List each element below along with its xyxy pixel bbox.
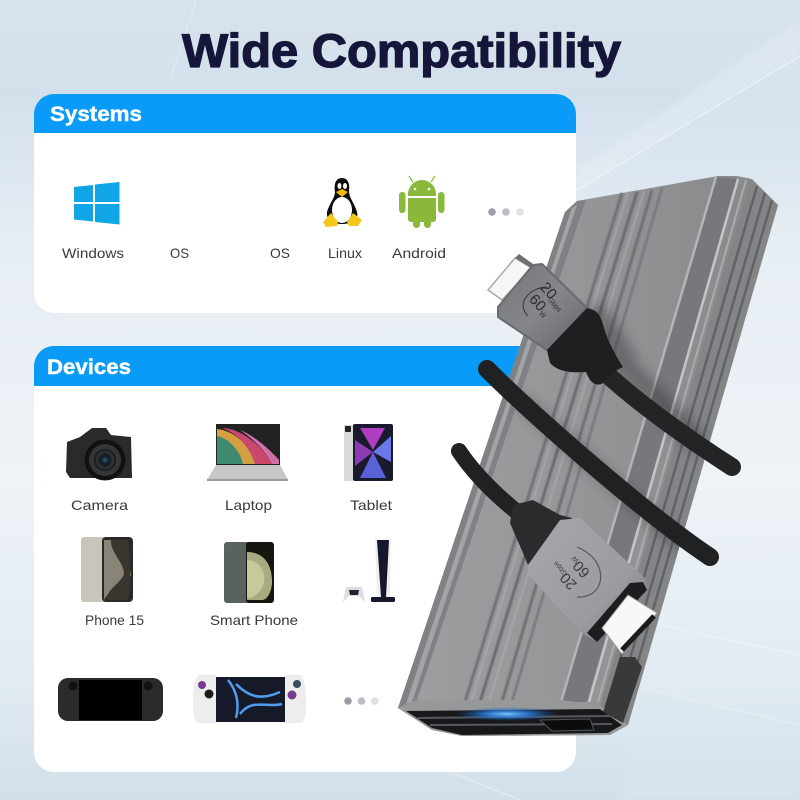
icon: linux penguin <box>323 178 362 227</box>
label: smart phone: Smart Phone <box>210 612 298 628</box>
middle cable <box>487 369 710 557</box>
lower connector arc <box>577 547 601 597</box>
label: camera: Camera <box>71 497 128 513</box>
upper connector print: W <box>537 310 547 320</box>
enclosure body <box>398 176 778 736</box>
panel: systems <box>34 94 576 313</box>
bottom lip <box>398 700 628 736</box>
label: laptop: Laptop <box>225 497 272 513</box>
lower connector print: 60 <box>570 557 594 581</box>
lower cable <box>459 451 522 516</box>
upper connector print <box>525 279 563 320</box>
upper cable <box>600 368 732 467</box>
icon: camera <box>66 428 132 480</box>
label: windows: Windows <box>62 245 124 261</box>
systems header <box>34 94 576 133</box>
enclosure <box>398 176 778 736</box>
label: linux: Linux <box>328 245 362 261</box>
devices heading: Devices <box>47 356 131 379</box>
ribs <box>465 188 662 702</box>
lower connector print <box>552 554 594 593</box>
icon: handheld white <box>193 675 306 723</box>
icon: phone 15 <box>81 537 133 602</box>
lower boot <box>510 500 572 565</box>
lower connector print: W <box>571 554 581 564</box>
upper boot <box>547 308 623 384</box>
icon: laptop <box>207 424 288 481</box>
label: tablet: Tablet <box>350 497 392 513</box>
dark channel <box>562 177 737 702</box>
panel: devices <box>34 346 576 772</box>
label: phone 15: Phone 15 <box>85 612 144 628</box>
lower connector print: Gbps <box>552 559 569 577</box>
label: os 2: OS <box>270 245 290 261</box>
lower plug tip <box>602 595 657 654</box>
more dots: systems <box>488 208 524 216</box>
lower connector print: 20 <box>557 569 581 593</box>
right bevel <box>600 180 778 725</box>
light edges <box>561 177 746 702</box>
dark side block <box>603 657 642 723</box>
lower housing <box>528 518 647 642</box>
upper usb-c connector <box>488 254 732 467</box>
devices header <box>34 346 540 386</box>
usb port <box>540 719 594 731</box>
led glow <box>455 707 559 721</box>
plug collar <box>587 582 647 642</box>
upper housing <box>498 264 587 350</box>
label: android: Android <box>392 245 446 261</box>
lower usb-c connector <box>459 451 657 654</box>
icon: tablet <box>344 424 393 481</box>
upper connector print: 20 <box>536 279 560 303</box>
left bevel <box>398 200 586 708</box>
title: Wide Compatibility <box>182 24 621 77</box>
upper connector print: 60 <box>525 291 549 315</box>
upper connector arc <box>523 287 547 316</box>
label: os 1: OS <box>170 245 189 261</box>
icon: android <box>399 176 444 228</box>
cable shadows <box>520 310 700 560</box>
icon: smart phone <box>224 542 274 603</box>
more dots: devices <box>344 697 379 705</box>
vent grille <box>406 709 622 735</box>
upper plug tip <box>488 254 533 300</box>
upper connector print: Gbps <box>546 296 563 314</box>
icon: handheld dark <box>58 678 163 721</box>
icon: game console <box>343 537 395 602</box>
icon: windows <box>74 182 120 224</box>
systems heading: Systems <box>50 103 142 126</box>
